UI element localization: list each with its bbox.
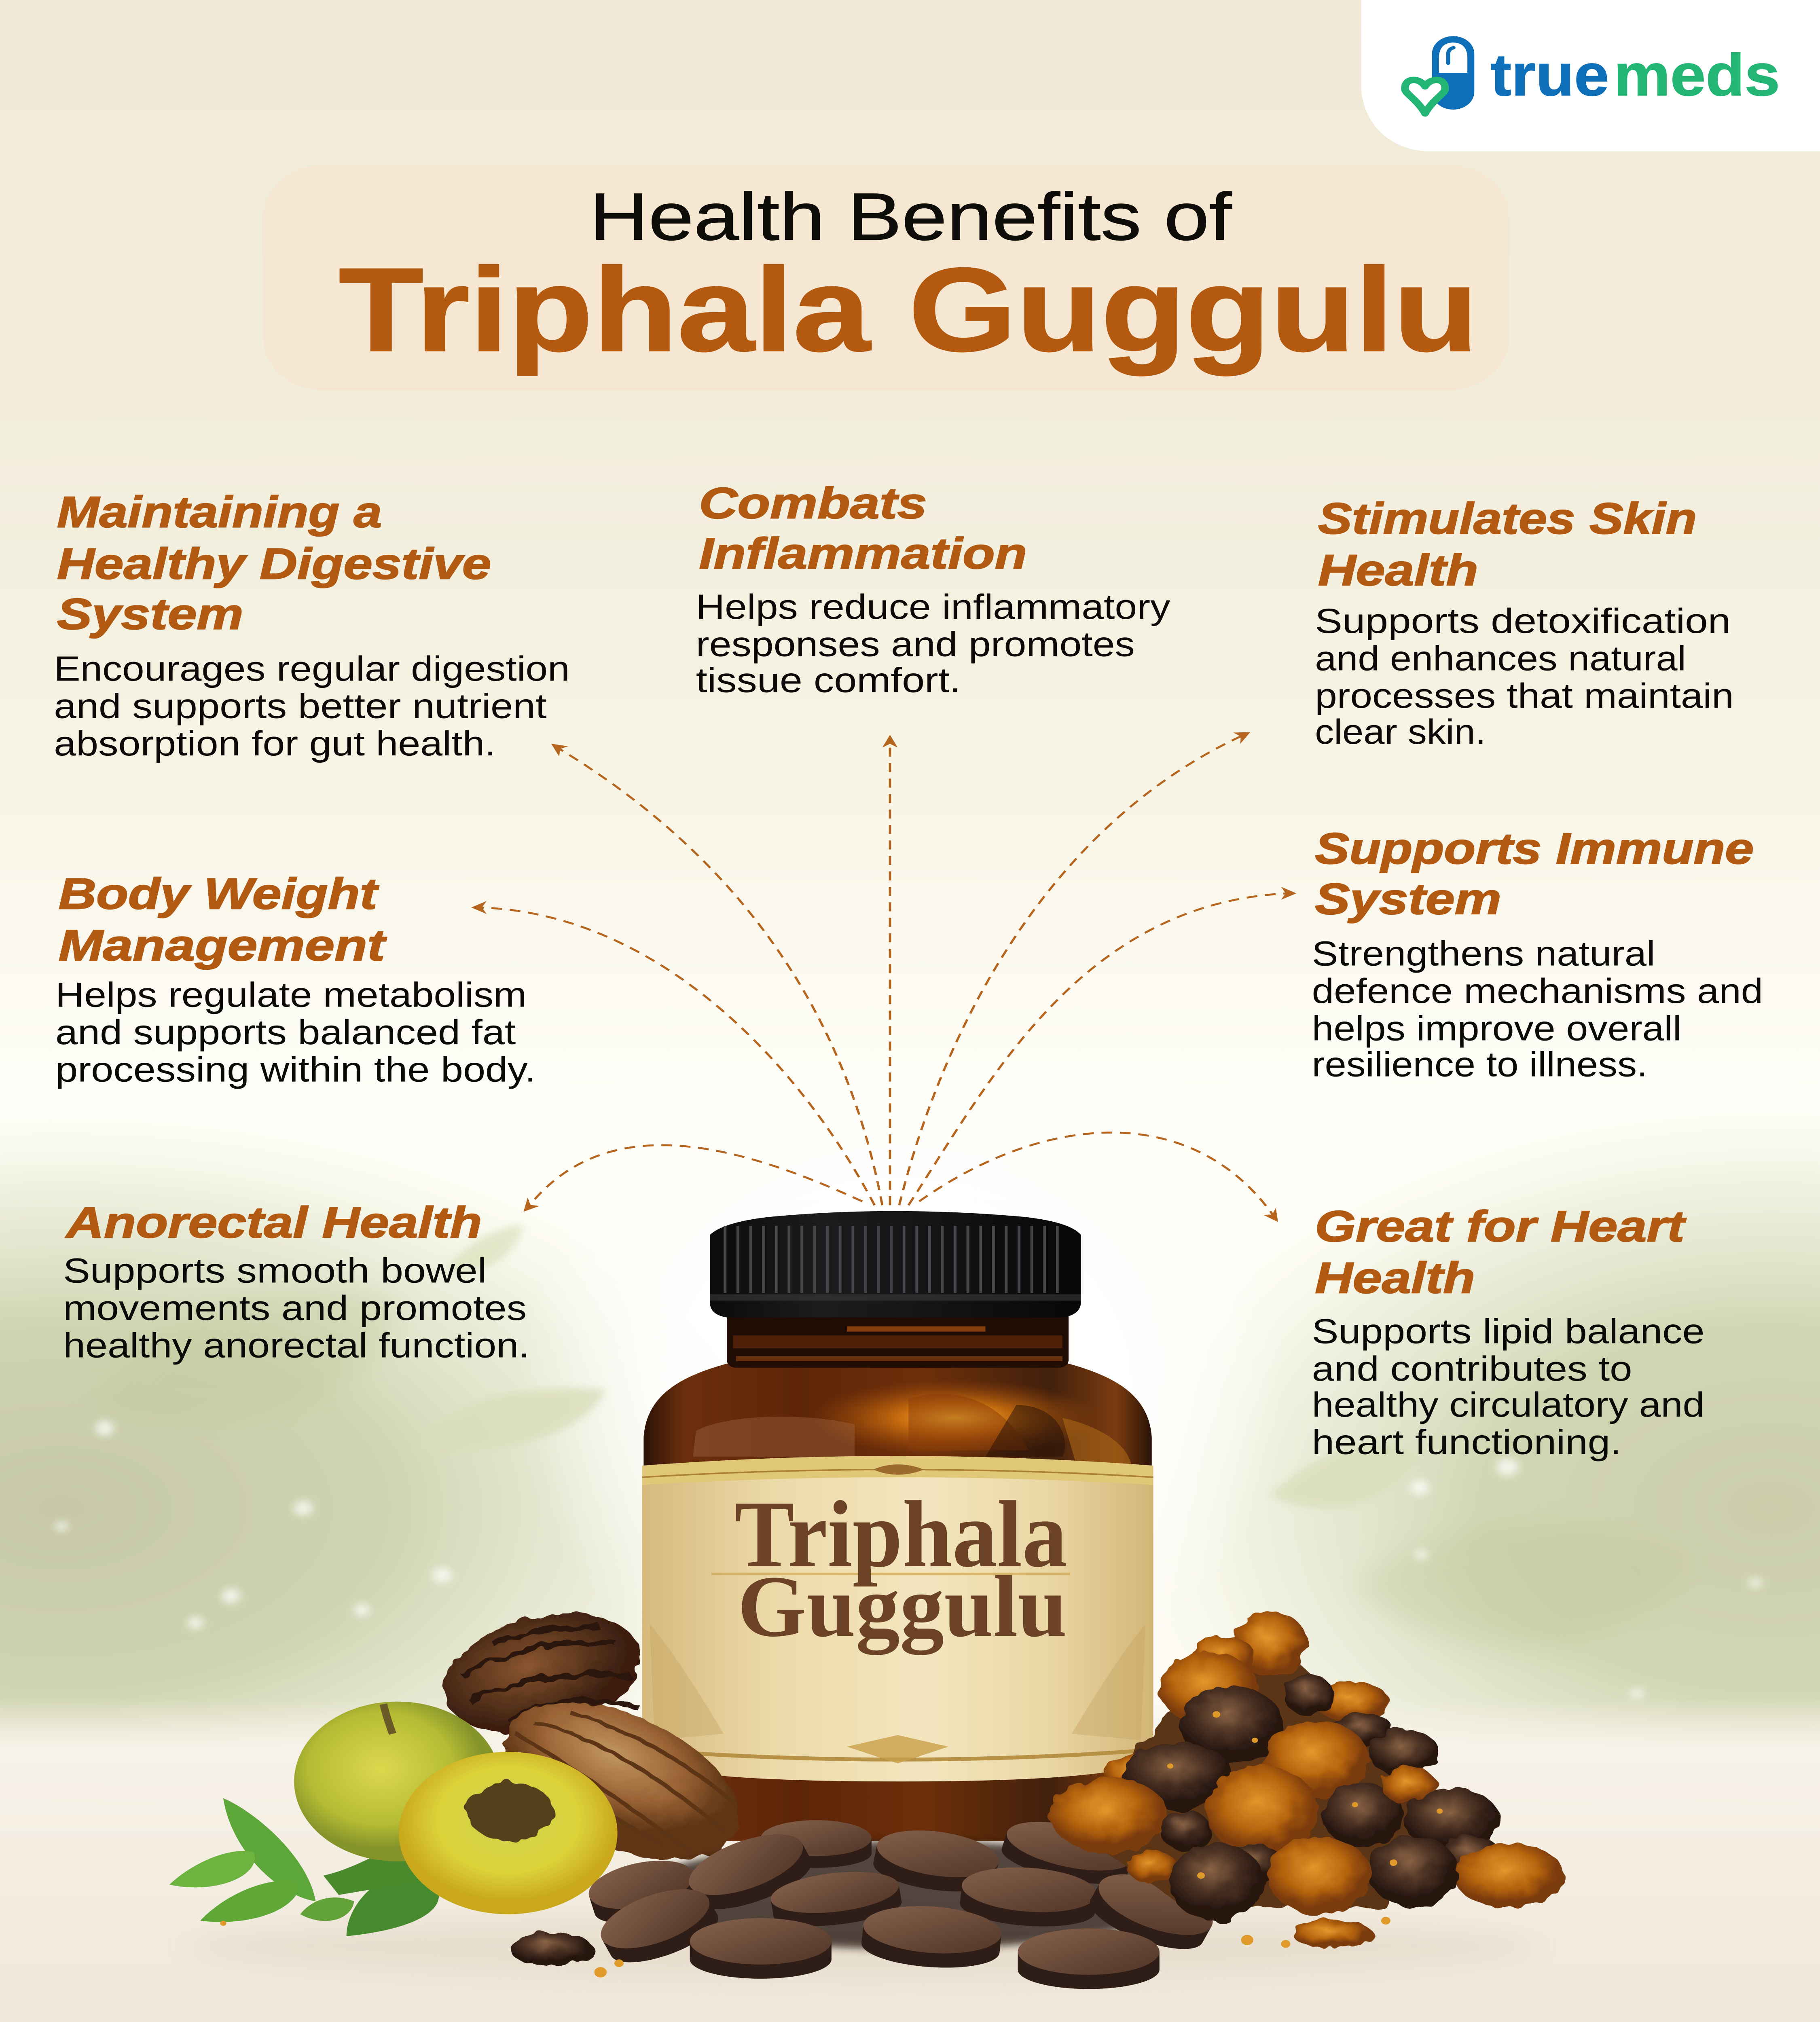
- benefit: body weight: [55, 869, 536, 1089]
- body text: processing within the body.: [55, 1050, 536, 1089]
- body text: and enhances natural: [1315, 639, 1686, 678]
- amla pit: [467, 1781, 553, 1841]
- heading: System: [57, 590, 243, 639]
- benefit: anorectal health: [63, 1198, 530, 1365]
- body text: [63, 1251, 530, 1365]
- soft shadow under ingredients: [185, 1913, 1540, 1980]
- fruit: green amla: [294, 1702, 500, 1861]
- heading: Inflammation: [699, 529, 1027, 578]
- fruit: light walnut: [472, 1671, 772, 1893]
- label text: [734, 1481, 1067, 1655]
- heading: Combats: [699, 479, 927, 528]
- tablet: [690, 1918, 832, 1979]
- label text: Triphala: [734, 1481, 1067, 1587]
- heading: Supports Immune: [1315, 825, 1754, 873]
- benefit: inflammation: [696, 479, 1170, 700]
- tablet: [678, 1822, 821, 1920]
- product bottle: [642, 1211, 1153, 1841]
- heading: [1318, 495, 1697, 595]
- pile underlay: [1093, 1637, 1478, 1908]
- body text: Encourages regular digestion: [54, 649, 570, 688]
- heading: Health: [1318, 546, 1478, 595]
- tablets: [582, 1812, 1223, 1989]
- tablet: [582, 1852, 705, 1931]
- body text: clear skin.: [1315, 713, 1486, 751]
- arrow: anorectal: [530, 1145, 862, 1205]
- heading: Management: [59, 921, 387, 970]
- body text: processes that maintain: [1315, 677, 1734, 715]
- heading: Maintaining a: [57, 488, 382, 537]
- body text: Helps regulate metabolism: [55, 975, 527, 1015]
- body text: [55, 975, 536, 1089]
- heading: Health: [1315, 1254, 1475, 1303]
- title panel: [263, 165, 1509, 391]
- heading: Great for Heart: [1315, 1202, 1687, 1251]
- arrow: skin: [899, 735, 1244, 1205]
- dashed arrows from bottle to benefits: [471, 732, 1297, 1222]
- arrow: immune: [908, 893, 1289, 1205]
- body text: heart functioning.: [1312, 1423, 1621, 1462]
- title line 1: Health Benefits of: [590, 179, 1232, 254]
- body text: absorption for gut health.: [54, 724, 496, 763]
- body text: healthy circulatory and: [1312, 1385, 1704, 1424]
- leaves: [169, 1798, 439, 1936]
- logo wordmark: [1490, 42, 1780, 108]
- heading: Healthy Digestive: [57, 539, 491, 588]
- body text: healthy anorectal function.: [63, 1326, 530, 1365]
- tablet: [1018, 1929, 1160, 1989]
- body text: helps improve overall: [1312, 1009, 1681, 1048]
- guggul resin pile: [510, 1611, 1564, 1966]
- title line 2: Triphala Guggulu: [339, 244, 1478, 376]
- fruit: cut amla: [399, 1752, 618, 1914]
- bottle label: [642, 1456, 1153, 1781]
- body text: [696, 588, 1170, 700]
- arrow: inflammation: [890, 741, 891, 1205]
- heading: Stimulates Skin: [1318, 495, 1697, 543]
- body text: and supports balanced fat: [55, 1013, 516, 1052]
- logo panel: [1361, 0, 1820, 152]
- arrow: digestive: [557, 748, 882, 1205]
- body text: [1315, 602, 1734, 751]
- tablet: [859, 1901, 1004, 1972]
- heading: [1315, 825, 1754, 924]
- benefit: skin health: [1315, 495, 1734, 751]
- body text: [1312, 934, 1763, 1084]
- body text: Supports smooth bowel: [63, 1251, 487, 1290]
- tablet: [768, 1866, 904, 1932]
- body text: tissue comfort.: [696, 661, 961, 700]
- body text: movements and promotes: [63, 1289, 527, 1328]
- arrowheads: [471, 732, 1297, 1222]
- heading: System: [1315, 875, 1501, 924]
- logo wordmark: meds: [1614, 42, 1780, 108]
- heading: Anorectal Health: [65, 1198, 482, 1247]
- benefit: immune system: [1312, 825, 1763, 1084]
- tablet: [870, 1823, 1003, 1898]
- bottle cap: [710, 1211, 1081, 1318]
- dark mass behind tablets: [631, 1841, 1185, 1949]
- fruit: dark walnut: [424, 1592, 660, 1754]
- tablet: [761, 1820, 872, 1868]
- body text: Strengthens natural: [1312, 934, 1655, 973]
- heading: [699, 479, 1027, 578]
- body text: defence mechanisms and: [1312, 972, 1763, 1011]
- heading: [57, 488, 491, 639]
- heading: Body Weight: [59, 869, 379, 918]
- bottle glass: [643, 1308, 1152, 1841]
- benefit: digestive system: [54, 488, 570, 763]
- body text: responses and promotes: [696, 625, 1135, 664]
- body text: and contributes to: [1312, 1349, 1632, 1388]
- heading: [1315, 1202, 1687, 1303]
- body text: [1312, 1312, 1704, 1462]
- tablet: [1081, 1862, 1223, 1960]
- icon: capsule with heart: [1405, 36, 1474, 114]
- resin highlights and golden droplets: [220, 1711, 1443, 1978]
- label text: Guggulu: [738, 1558, 1067, 1655]
- arrow: heart: [919, 1133, 1273, 1216]
- tablet: [590, 1877, 727, 1973]
- body text: [54, 649, 570, 763]
- body text: resilience to illness.: [1312, 1045, 1648, 1084]
- body text: Supports lipid balance: [1312, 1312, 1704, 1351]
- benefit: heart health: [1312, 1202, 1704, 1462]
- body text: Helps reduce inflammatory: [696, 588, 1170, 626]
- arrow: weight: [479, 907, 874, 1205]
- logo wordmark: true: [1490, 42, 1609, 108]
- tablet: [958, 1863, 1099, 1931]
- heading: [59, 869, 387, 970]
- body text: and supports better nutrient: [54, 687, 547, 726]
- tablet: [997, 1812, 1138, 1893]
- body text: Supports detoxification: [1315, 602, 1731, 641]
